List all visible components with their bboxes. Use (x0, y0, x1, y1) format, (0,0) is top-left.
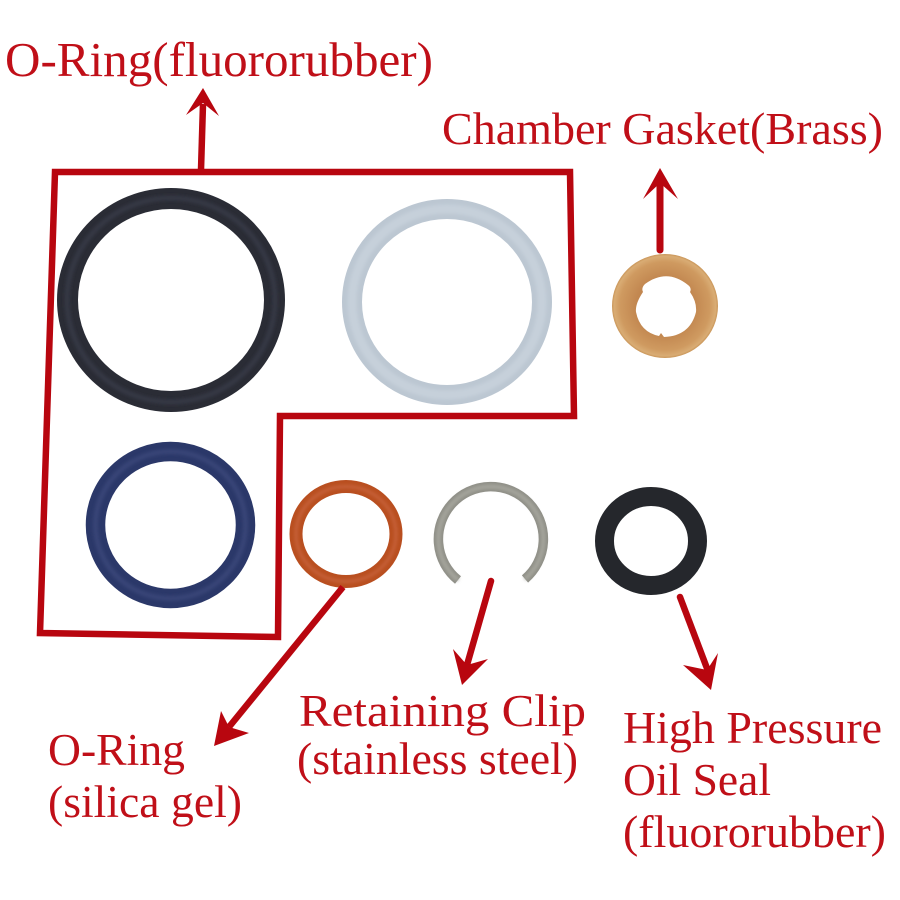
text: High Pressure Oil Seal label: (fluororubber) (623, 807, 886, 857)
arrow: up to O-Ring fluororubber label (186, 88, 219, 170)
text: Retaining Clip label (297, 685, 586, 784)
icon: stainless steel retaining clip (438, 487, 543, 580)
outline: bracket around fluororubber rings (40, 172, 574, 637)
ring: orange silica gel O-ring (296, 486, 396, 582)
ring: large black O-ring (67, 198, 275, 402)
text: O-Ring silica gel label (48, 725, 242, 827)
text: Retaining Clip label: Retaining Clip (299, 685, 586, 736)
text: Retaining Clip label: (stainless steel) (297, 734, 578, 784)
ring: blue O-ring (96, 452, 246, 598)
arrow: clip to Retaining Clip label (453, 581, 491, 685)
icon: brass chamber gasket (612, 254, 718, 358)
title: O-Ring fluororubber label: O-Ring(fluororubber) (5, 32, 433, 87)
arrow: oil seal to High Pressure label (680, 597, 718, 690)
heading: Chamber Gasket label: Chamber Gasket(Brass) (442, 104, 883, 154)
ring: large grey O-ring (352, 209, 542, 395)
text: O-Ring silica gel label: (silica gel) (48, 777, 242, 827)
text: High Pressure Oil Seal label (623, 703, 886, 857)
text: High Pressure Oil Seal label: High Pressure (623, 703, 882, 753)
arrow: orange ring to O-Ring silica gel label (214, 587, 343, 746)
text: O-Ring silica gel label: O-Ring (48, 725, 185, 775)
arrow: up to Chamber Gasket label (643, 168, 678, 250)
ring: black high pressure oil seal (604, 496, 698, 586)
text: High Pressure Oil Seal label: Oil Seal (623, 755, 771, 805)
